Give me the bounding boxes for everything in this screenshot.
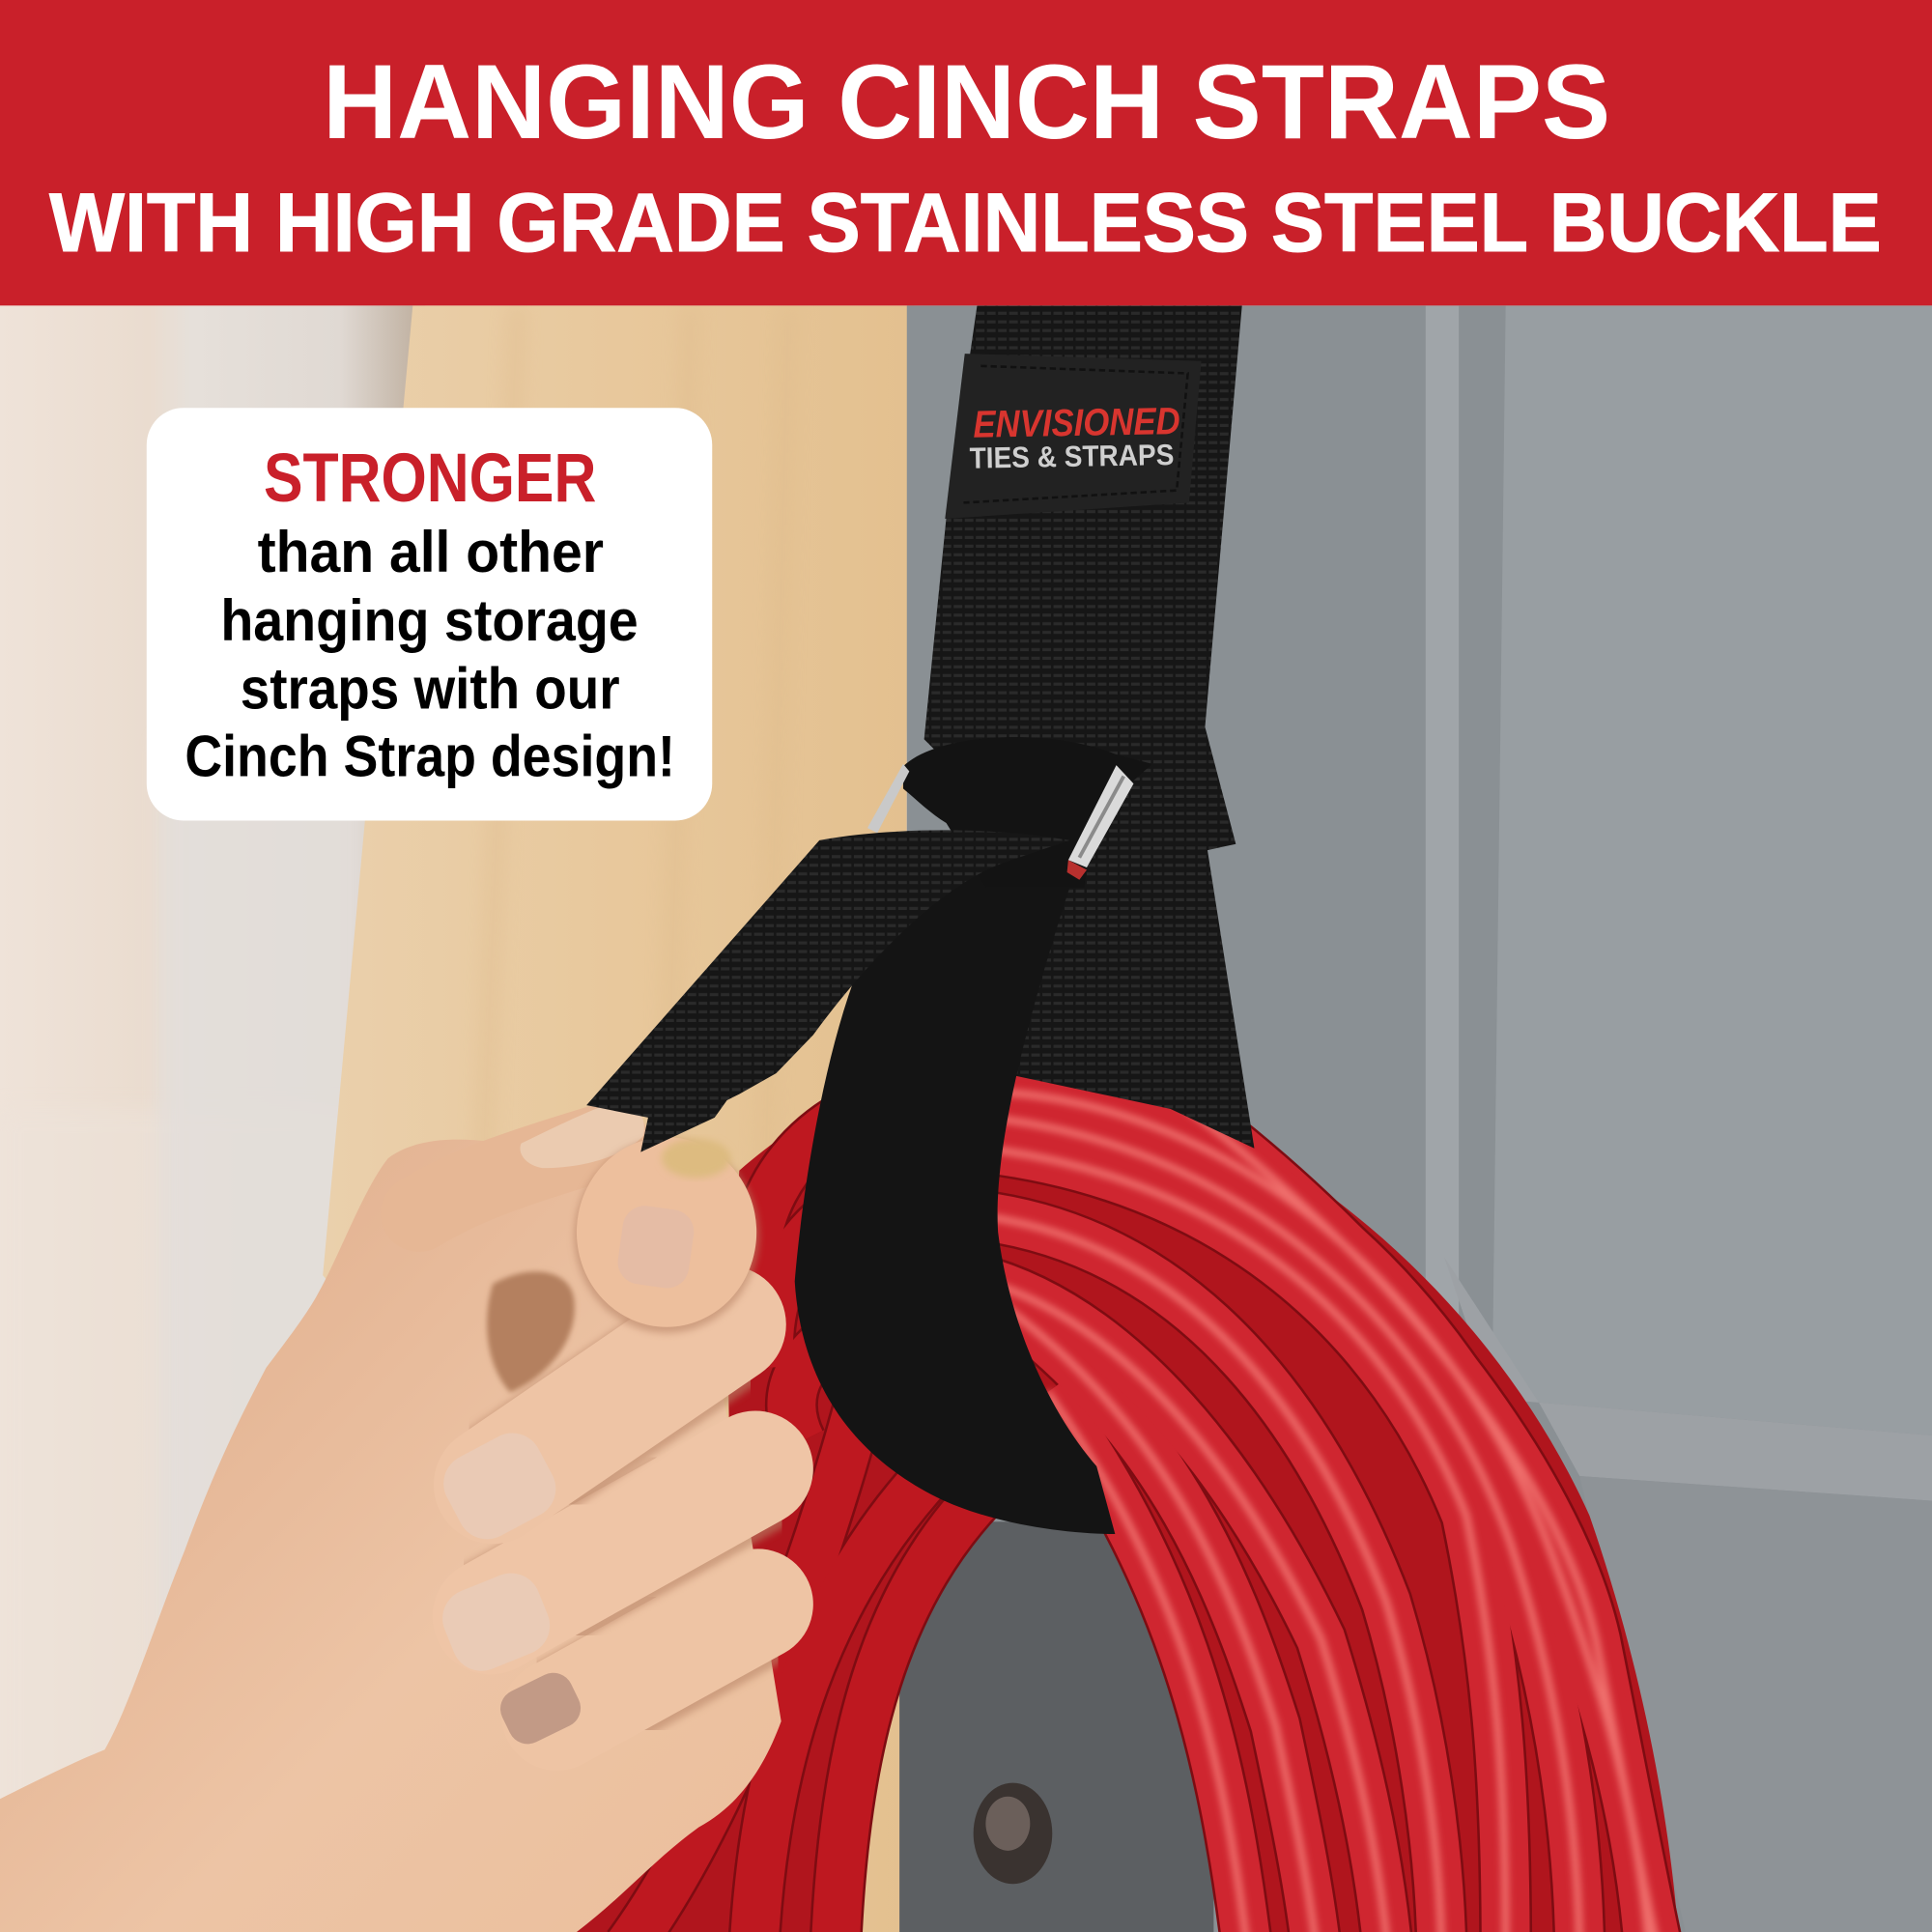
middle nail [433, 1423, 566, 1549]
middle shadow [493, 1328, 727, 1489]
palm and wrist [0, 1115, 781, 1932]
photo background: wood board [323, 305, 914, 1932]
woven brand label [945, 354, 1202, 519]
photo background: dark recess and bolt [899, 1521, 1213, 1932]
title line two: WITH HIGH GRADE STAINLESS STEEL BUCKLE [49, 176, 1882, 270]
callout body: straps with our [241, 656, 620, 721]
stainless steel buckle [867, 764, 1133, 880]
callout body: hanging storage [220, 588, 639, 653]
thumb nail [520, 1101, 644, 1168]
callout body [185, 520, 675, 789]
callout body: than all other [258, 520, 604, 584]
thumb [419, 1140, 610, 1213]
index shadow [574, 1139, 759, 1333]
index finger [577, 1137, 756, 1327]
pinky shadow [557, 1608, 757, 1719]
callout [147, 408, 712, 820]
shadow between thumb and fingers [487, 1271, 575, 1392]
callout heading: STRONGER [264, 440, 596, 517]
photo background: grey storage panels [907, 305, 1932, 1932]
velcro wrap at buckle [903, 737, 1152, 887]
velcro pull tab [586, 830, 1069, 1152]
pinky [557, 1605, 757, 1716]
title line one: HANGING CINCH STRAPS [323, 43, 1610, 161]
woven brand label: ENVISIONED [973, 400, 1180, 446]
callout body: Cinch Strap design! [185, 724, 675, 789]
red extension cord coil [554, 1067, 1678, 1932]
black webbing strap [924, 305, 1254, 1149]
velcro loop around cord [795, 838, 1115, 1534]
ring nail [434, 1564, 558, 1680]
index fingertip yellow [662, 1139, 730, 1178]
pinky nail [494, 1666, 587, 1750]
middle finger [493, 1324, 727, 1485]
index nail [615, 1203, 696, 1291]
ring shadow [491, 1472, 755, 1620]
woven brand label: TIES & STRAPS [969, 439, 1175, 475]
header banner [0, 0, 1932, 305]
hand [0, 1101, 781, 1932]
ring finger [491, 1468, 755, 1616]
